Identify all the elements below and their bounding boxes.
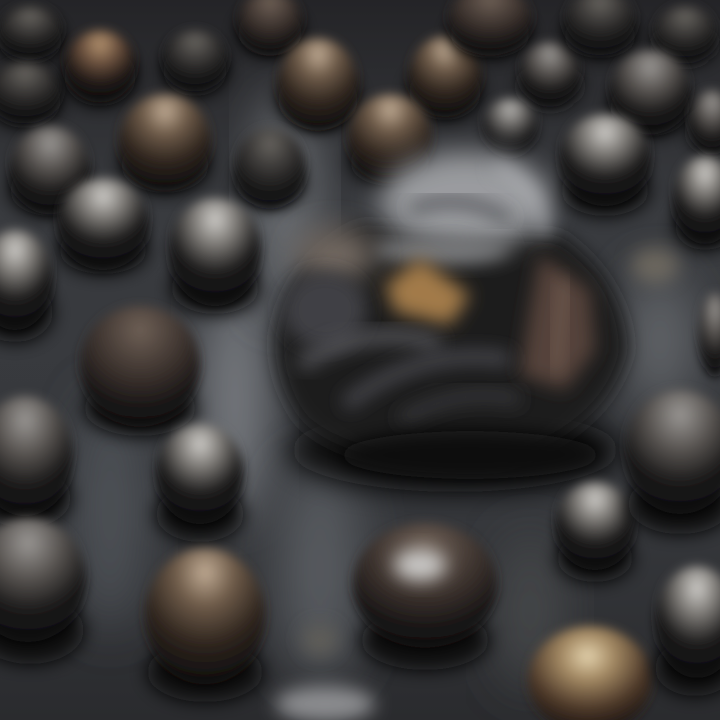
cast shadow (290, 408, 620, 492)
amber interior (385, 258, 470, 325)
brown right shard (520, 255, 595, 390)
dark stone body (275, 225, 628, 465)
dark base (340, 431, 600, 479)
large central broken stone (275, 152, 628, 492)
stones: lower right (353, 390, 720, 720)
stones: top row (0, 0, 720, 154)
grey veins (300, 336, 440, 365)
left mottled shard (295, 227, 375, 283)
upper pale shard (380, 152, 550, 248)
stones: lower left (0, 396, 375, 720)
stones: left middle (0, 178, 720, 436)
stones: second row (10, 94, 720, 283)
